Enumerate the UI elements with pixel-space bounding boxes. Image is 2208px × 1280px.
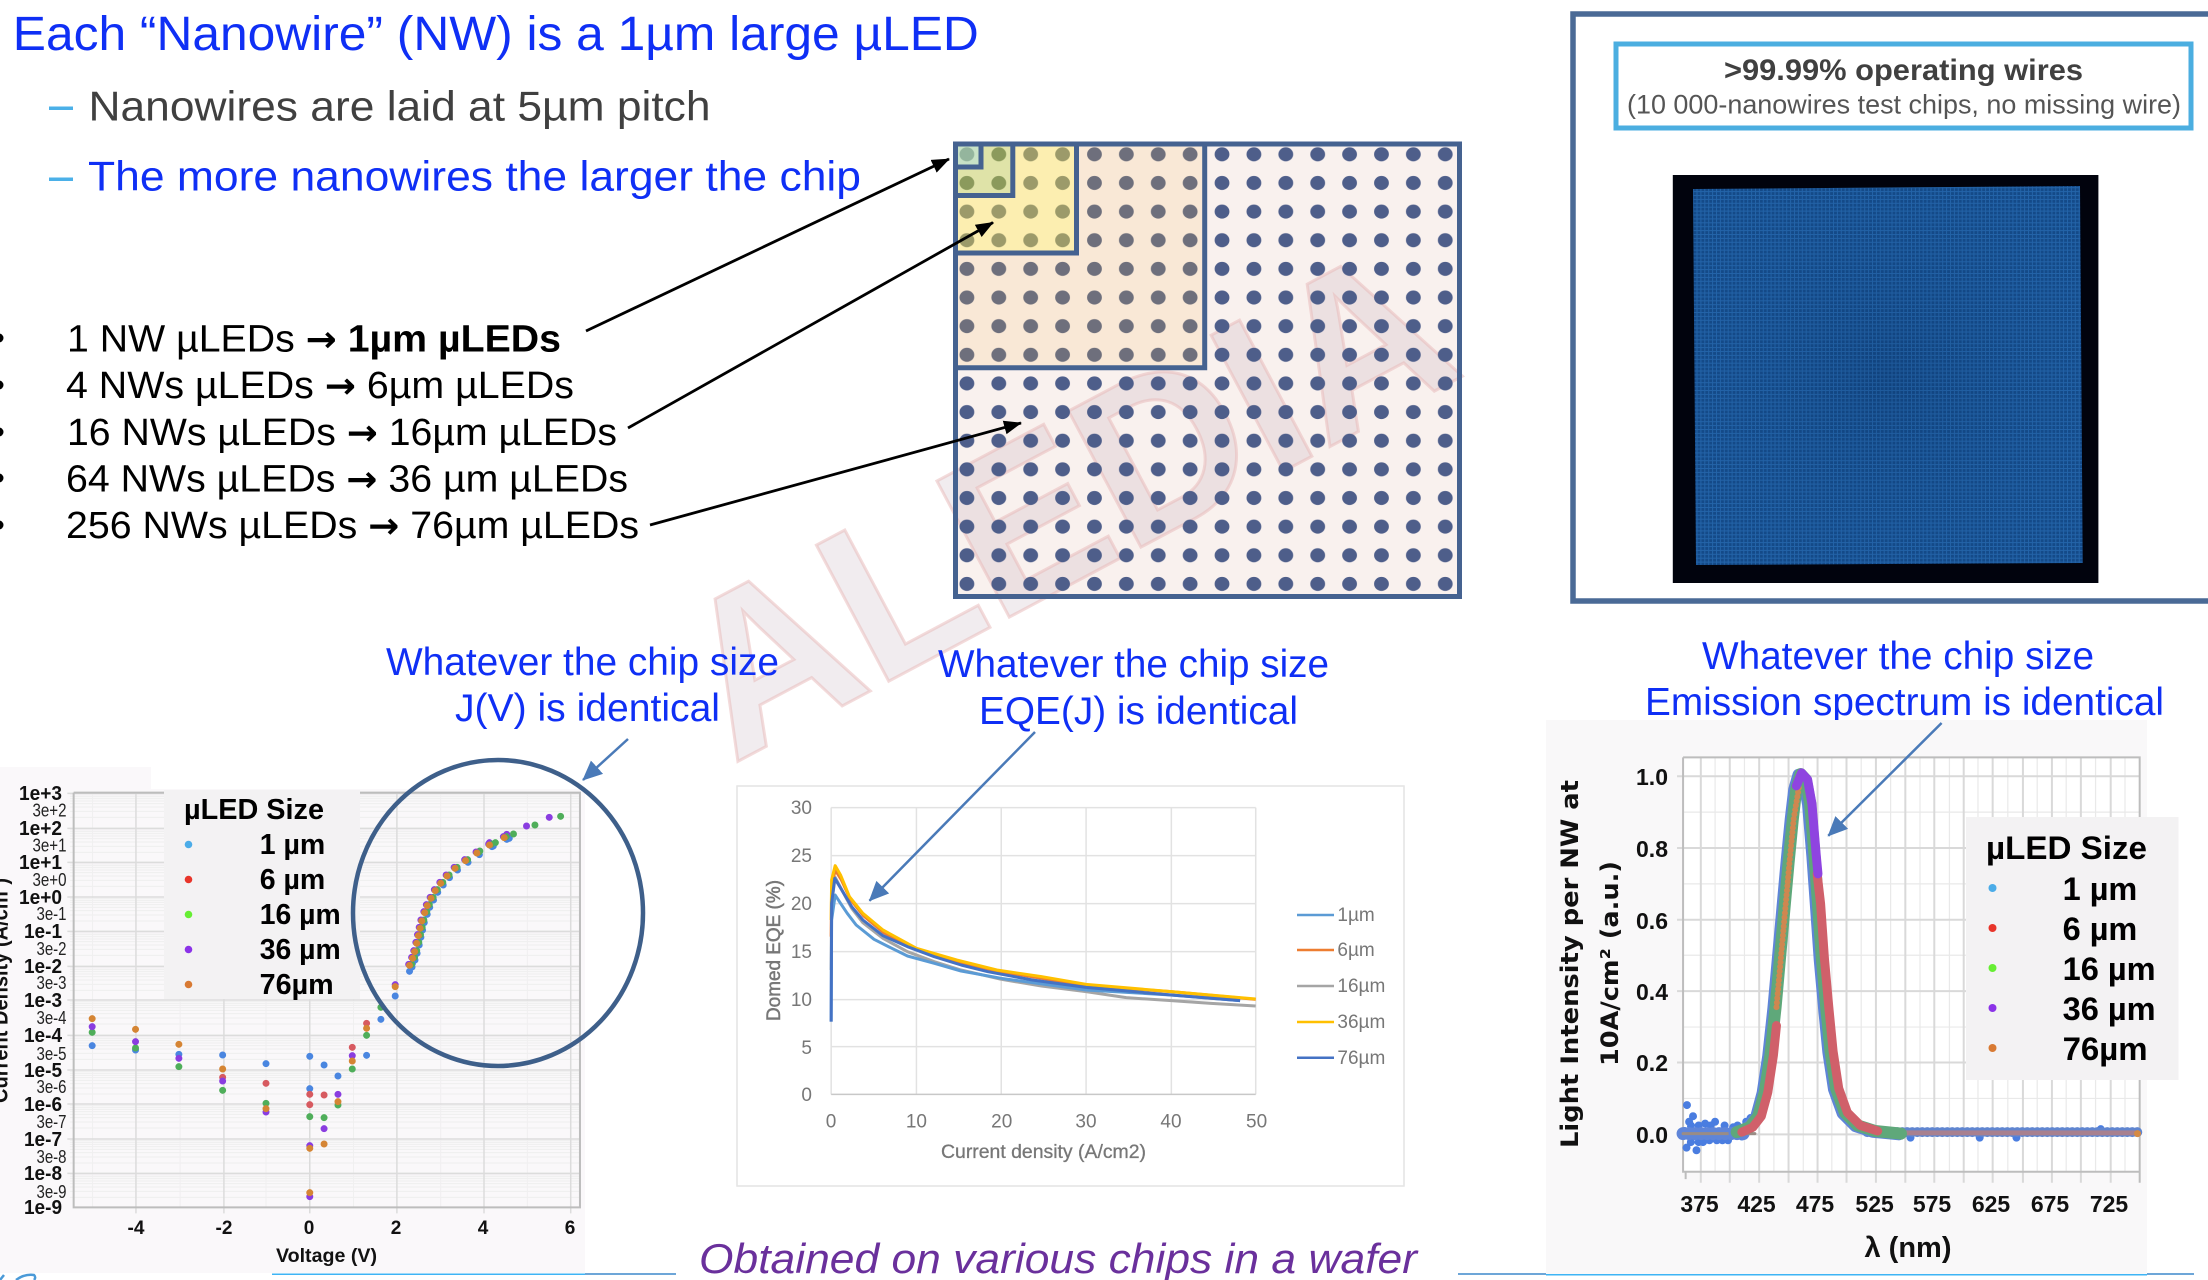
spectrum y labels (1636, 764, 1668, 1148)
spectrum y labels: 0.2 (1636, 1050, 1668, 1076)
circle highlight (353, 760, 643, 1066)
heading: spectrum (1645, 635, 2164, 724)
heading: J(V): J(V) is identical (455, 687, 720, 730)
J(V) x axis labels: 4 (478, 1218, 489, 1239)
EQE legend: 1µm (1337, 905, 1375, 926)
J(V) y axis labels: 1e+0 (19, 887, 62, 909)
spectrum x labels: 625 (1972, 1191, 2010, 1217)
footer rule (272, 1273, 2194, 1276)
panel: nanowire grid (956, 144, 1460, 596)
J(V) y axis labels: 3e-8 (36, 1147, 66, 1167)
spectrum x labels: 525 (1855, 1191, 1894, 1217)
bullet: chip size: The more nanowires the larger the chip (88, 153, 861, 200)
arrow: EQE heading (870, 732, 1035, 901)
J(V) legend: 36 µm (260, 934, 341, 966)
J(V) y axis labels: 1e-5 (24, 1060, 62, 1082)
EQE y labels: 5 (801, 1038, 812, 1059)
J(V) y axis labels: 1e-9 (24, 1197, 62, 1219)
spectrum x labels: 375 (1680, 1191, 1719, 1217)
spectrum x title: λ (nm) (1864, 1232, 1952, 1264)
EQE y labels: 15 (791, 942, 812, 963)
spectrum legend: 76µm (2063, 1031, 2148, 1067)
title: Each “Nanowire” (NW) is a 1µm large µLED (13, 8, 979, 61)
J(V) x axis labels: -2 (216, 1218, 232, 1239)
J(V) y axis labels (19, 783, 66, 1219)
EQE legend: 16µm (1337, 976, 1385, 997)
EQE y labels: 10 (791, 990, 812, 1011)
size list: 16 NWs µLEDs → 16µm µLEDs (67, 412, 617, 454)
spectrum x labels (1680, 1191, 2128, 1217)
spectrum legend: µLED Size (1986, 830, 2147, 866)
J(V) y axis labels: 3e-6 (36, 1077, 66, 1097)
arrow: 256 NW to grid (650, 423, 1021, 525)
J(V) y axis labels: 1e-6 (24, 1094, 62, 1116)
J(V) legend: 1 µm (260, 829, 325, 861)
J(V) y axis labels: 3e+2 (32, 800, 66, 820)
spectrum y labels: 0.6 (1636, 908, 1668, 934)
heading: J(V) (386, 641, 779, 730)
callout: operating wires: >99.99% operating wires (1724, 54, 2083, 87)
J(V) y axis labels: 3e-1 (36, 904, 66, 924)
spectrum y labels: 0.0 (1636, 1122, 1668, 1148)
J(V) y axis labels: 3e+0 (32, 870, 66, 890)
EQE legend: 76µm (1337, 1048, 1385, 1069)
J(V) x axis labels: 2 (391, 1218, 401, 1239)
watermark: ALEDIA (638, 195, 1490, 806)
spectrum x labels: 675 (2031, 1191, 2069, 1217)
EQE curves (831, 866, 1256, 1022)
callout: operating wires (1616, 44, 2191, 128)
EQE y labels: 25 (791, 846, 812, 867)
J(V) y axis labels: 3e+1 (32, 836, 66, 856)
panel: nanowire grid background (956, 144, 1460, 596)
J(V) y axis labels: 1e-7 (24, 1129, 62, 1151)
EQE x labels (826, 1112, 1267, 1133)
size list: 256 NWs µLEDs → 76µm µLEDs (66, 505, 639, 547)
J(V) y axis labels: 1e-2 (24, 956, 62, 978)
size list: 64 NWs µLEDs → 36 µm µLEDs (66, 459, 628, 501)
size list: 1 NW µLEDs → 1µm µLEDs (67, 319, 561, 361)
J(V) data points (92, 816, 561, 1197)
arrow: J(V) heading (583, 739, 628, 780)
EQE y labels (791, 798, 812, 1106)
J(V) x axis labels (128, 1218, 575, 1239)
photo: lit chip (1673, 175, 2098, 583)
J(V) y axis labels: 3e-4 (36, 1008, 66, 1028)
J(V) y axis labels: 1e-8 (24, 1163, 62, 1185)
spectrum x labels: 425 (1737, 1191, 1776, 1217)
J(V) x axis labels: 6 (565, 1218, 575, 1239)
J(V) y axis labels: 1e-1 (24, 921, 62, 943)
J(V) gridlines (67, 793, 580, 1213)
spectrum legend: 16 µm (2063, 951, 2156, 987)
J(V) legend: 6 µm (260, 864, 325, 896)
callout: operating wires: (10 000-nanowires test chips, no missing wire) (1627, 90, 2181, 120)
64 nanowire zone (956, 144, 1205, 368)
EQE x labels: 10 (906, 1112, 927, 1133)
EQE x labels: 20 (991, 1112, 1012, 1133)
EQE y labels: 30 (791, 798, 812, 819)
EQE legend: 36µm (1337, 1012, 1385, 1033)
EQE y labels: 0 (801, 1085, 812, 1106)
chart: EQE(J) (737, 786, 1404, 1186)
EQE x labels: 0 (826, 1112, 836, 1133)
arrow: 1 NW to grid (586, 159, 949, 331)
J(V) y axis labels: 3e-3 (36, 973, 66, 993)
spectrum y labels: 1.0 (1636, 764, 1668, 790)
heading: spectrum: Whatever the chip size (1702, 635, 2094, 678)
J(V) y axis labels: 1e+1 (19, 852, 62, 874)
J(V) x axis labels: -4 (128, 1218, 145, 1239)
panel: operating wires (1573, 14, 2208, 601)
EQE x labels: 50 (1246, 1112, 1267, 1133)
spectrum x labels: 725 (2090, 1191, 2128, 1217)
J(V) legend: µLED Size (184, 794, 324, 826)
spectrum y labels: 0.8 (1636, 836, 1668, 862)
spectrum gridlines (1677, 757, 2140, 1183)
spectrum legend (1966, 817, 2178, 1080)
spectrum x labels: 575 (1913, 1191, 1951, 1217)
J(V) legend: 16 µm (260, 899, 341, 931)
J(V) y axis labels: 1e+2 (19, 818, 62, 840)
J(V) legend (164, 790, 360, 1001)
J(V) y axis labels: 3e-9 (36, 1182, 66, 1202)
spectrum data (1683, 773, 2140, 1150)
heading: J(V): Whatever the chip size (386, 641, 779, 684)
J(V) y axis labels: 1e-4 (24, 1025, 63, 1047)
J(V) legend: 76µm (260, 969, 334, 1001)
spectrum y title: Light Intensity per NW at (1556, 780, 1584, 1148)
spectrum legend: 1 µm (2063, 871, 2137, 907)
heading: spectrum: Emission spectrum is identical (1645, 681, 2164, 724)
spectrum y labels: 0.4 (1636, 979, 1668, 1005)
J(V) y axis labels: 1e+3 (19, 783, 62, 805)
1 nanowire zone (956, 144, 981, 167)
EQE legend: 6µm (1337, 940, 1375, 961)
grid frame (956, 144, 1460, 596)
EQE x labels: 30 (1075, 1112, 1097, 1133)
bullet: pitch: Nanowires are laid at 5µm pitch (88, 83, 710, 130)
EQE x title: Current density (A/cm2) (941, 1142, 1146, 1163)
spectrum y title: 10A/cm² (a.u.) (1596, 861, 1624, 1066)
J(V) x axis title: Voltage (V) (276, 1246, 377, 1267)
EQE gridlines (831, 808, 1256, 1094)
EQE x labels: 40 (1160, 1112, 1182, 1133)
heading: EQE(J): Whatever the chip size (938, 643, 1329, 686)
chart: emission spectrum (1546, 720, 2178, 1274)
size list (0, 319, 639, 547)
J(V) y axis labels: 1e-3 (24, 990, 62, 1012)
J(V) y axis labels: 3e-2 (36, 939, 66, 959)
icon: logo swoosh (0, 1275, 35, 1280)
spectrum x labels: 475 (1796, 1191, 1834, 1217)
J(V) y axis labels: 3e-5 (36, 1044, 66, 1064)
arrow: spectrum heading (1828, 723, 1942, 836)
EQE y title: Domed EQE (%) (764, 880, 785, 1021)
J(V) y axis labels: 3e-7 (36, 1112, 66, 1132)
heading: EQE(J) (938, 643, 1329, 733)
spectrum legend: 36 µm (2063, 991, 2156, 1027)
arrow: 16 NW to grid (628, 222, 993, 428)
EQE legend (1297, 905, 1385, 1069)
heading: EQE(J): EQE(J) is identical (979, 690, 1298, 733)
J(V) x axis labels: 0 (304, 1218, 314, 1239)
spectrum y title (1556, 780, 1624, 1148)
EQE y labels: 20 (791, 894, 812, 915)
size list: 4 NWs µLEDs → 6µm µLEDs (66, 365, 574, 407)
spectrum legend: 6 µm (2063, 911, 2137, 947)
16 nanowire zone (956, 144, 1076, 253)
4 nanowire zone (956, 144, 1013, 196)
chart: J(V) (0, 767, 585, 1273)
